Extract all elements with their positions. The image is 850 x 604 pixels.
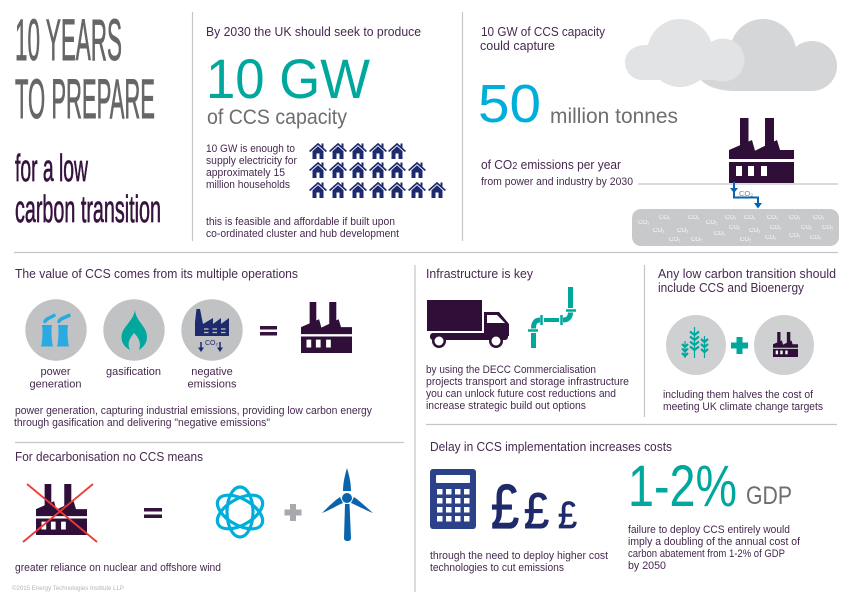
storage reservoir: CO₂ xyxy=(813,215,825,221)
big number 1-2%: 1-2% xyxy=(628,454,737,519)
icon: houses xyxy=(310,144,445,198)
panel: infrastructure xyxy=(426,266,629,412)
feasibility text: this is feasible and affordable if built upon xyxy=(206,216,395,228)
icon: crossed-out factory xyxy=(23,484,97,542)
description: meeting UK climate change targets xyxy=(663,401,823,413)
intro text xyxy=(480,25,606,53)
storage reservoir: CO₂ xyxy=(749,228,761,234)
title: 10 YEARS xyxy=(15,8,122,73)
households text: million households xyxy=(206,179,290,191)
panel: value of CCS xyxy=(14,266,372,429)
description: including them halves the cost of xyxy=(663,389,814,401)
icon: truck xyxy=(427,300,509,348)
heading xyxy=(658,266,836,295)
million tonnes: million tonnes xyxy=(550,105,678,128)
description xyxy=(14,405,372,429)
heading: For decarbonisation no CCS means xyxy=(15,449,203,464)
panel: 50 million tonnes xyxy=(478,19,839,246)
right description xyxy=(628,524,801,572)
heading: Infrastructure is key xyxy=(426,266,533,281)
storage reservoir: CO₂ xyxy=(801,225,813,231)
heading: Any low carbon transition should xyxy=(658,266,836,281)
storage reservoir: CO₂ xyxy=(725,215,737,221)
icon: pound signs: £ xyxy=(491,473,519,542)
households text: approximately 15 xyxy=(206,167,285,179)
intro text: could capture xyxy=(480,39,555,53)
left description: through the need to deploy higher cost xyxy=(430,550,608,562)
icon: atom xyxy=(212,487,268,537)
emissions text: of CO2 emissions per year xyxy=(481,157,622,172)
labels: power xyxy=(41,366,71,378)
heading: include CCS and Bioenergy xyxy=(658,280,804,295)
storage reservoir: CO₂ xyxy=(688,215,700,221)
title xyxy=(15,8,161,231)
storage reservoir: CO₂ xyxy=(653,228,665,234)
ground line xyxy=(638,183,838,185)
storage reservoir: CO₂ xyxy=(740,237,752,243)
left description xyxy=(430,550,608,574)
arrow: CO2 to storage xyxy=(730,182,762,208)
icon: clouds xyxy=(625,19,837,91)
description: increase strategic build out options xyxy=(426,400,586,412)
right description: by 2050 xyxy=(628,560,666,572)
power and industry text: from power and industry by 2030 xyxy=(481,176,633,188)
intro text: By 2030 the UK should seek to produce xyxy=(206,24,421,39)
title: carbon transition xyxy=(15,189,161,231)
icon: power generation xyxy=(25,299,87,361)
icon: factory xyxy=(301,302,352,353)
icon: calculator xyxy=(430,469,476,529)
storage reservoir: CO₂ xyxy=(691,237,703,243)
description xyxy=(426,364,629,412)
storage reservoir xyxy=(632,209,839,246)
panel: CCS and bioenergy xyxy=(658,266,836,413)
plus sign xyxy=(731,337,748,354)
panel: 10 GW xyxy=(206,24,445,240)
labels xyxy=(30,366,237,390)
storage reservoir: CO₂ xyxy=(744,215,756,221)
storage reservoir: CO₂ xyxy=(714,231,726,237)
icon: factory xyxy=(729,118,794,183)
feasibility text xyxy=(206,216,399,240)
description: projects transport and storage infrastructure xyxy=(426,376,629,388)
right description: imply a doubling of the annual cost of xyxy=(628,536,801,548)
households text: 10 GW is enough to xyxy=(206,143,295,155)
storage reservoir: CO₂ xyxy=(677,228,689,234)
description: you can unlock future cost reductions and xyxy=(426,388,616,400)
storage reservoir: CO₂ xyxy=(789,215,801,221)
description: by using the DECC Commercialisation xyxy=(426,364,596,376)
icon: pound signs: £ xyxy=(524,483,549,539)
icon: pound signs: £ xyxy=(558,495,577,537)
storage reservoir: CO₂ xyxy=(638,220,650,226)
storage reservoir: CO₂ xyxy=(659,215,671,221)
description: greater reliance on nuclear and offshore wind xyxy=(15,562,221,574)
equals sign xyxy=(260,326,277,336)
storage reservoir: CO₂ xyxy=(765,235,777,241)
icon: negative emissions xyxy=(181,299,243,361)
labels: emissions xyxy=(188,378,237,390)
icon: pound signs xyxy=(491,473,577,542)
description xyxy=(663,389,823,413)
labels: gasification xyxy=(106,366,161,378)
storage reservoir: CO₂ xyxy=(669,237,681,243)
storage reservoir: CO₂ xyxy=(822,225,834,231)
GDP: GDP xyxy=(746,482,792,510)
storage reservoir: CO₂ xyxy=(767,215,779,221)
storage reservoir: CO₂ xyxy=(789,233,801,239)
labels: generation xyxy=(30,378,82,390)
households text xyxy=(206,143,297,191)
copyright: ©2015 Energy Technologies Institute LLP xyxy=(12,584,124,592)
arrow: CO2 to storage: CO₂ xyxy=(739,189,753,198)
intro text: 10 GW of CCS capacity xyxy=(481,25,606,39)
big number 10 GW: 10 GW xyxy=(206,47,370,110)
right description: failure to deploy CCS entirely would xyxy=(628,524,790,536)
labels: negative xyxy=(191,366,233,378)
icon: pipe xyxy=(528,287,576,348)
icon: wheat xyxy=(666,315,726,375)
of CCS capacity: of CCS capacity xyxy=(207,106,347,129)
big number 50: 50 xyxy=(478,74,541,134)
left description: technologies to cut emissions xyxy=(430,562,564,574)
icon: wind turbine xyxy=(322,468,373,541)
storage reservoir: CO₂ xyxy=(810,235,822,241)
right description: carbon abatement from 1-2% of GDP xyxy=(628,548,785,560)
storage reservoir: CO₂ xyxy=(729,225,741,231)
storage reservoir: CO₂ xyxy=(706,220,718,226)
equals sign xyxy=(144,508,162,518)
text: TO PREPARE xyxy=(15,67,155,130)
heading: The value of CCS comes from its multiple operations xyxy=(15,266,298,281)
panel: no CCS xyxy=(15,449,373,574)
heading: Delay in CCS implementation increases costs xyxy=(430,439,672,454)
description: through gasification and delivering "negative emissions" xyxy=(14,417,270,429)
storage reservoir: CO₂ xyxy=(770,225,782,231)
feasibility text: co-ordinated cluster and hub development xyxy=(206,228,399,240)
icon: gasification xyxy=(103,299,165,361)
description: power generation, capturing industrial emissions, providing low carbon energy xyxy=(15,405,372,417)
icon: negative emissions: CO₂ xyxy=(205,340,218,347)
plus sign xyxy=(284,504,302,521)
households text: supply electricity for xyxy=(206,155,297,167)
title: for a low xyxy=(15,148,88,190)
panel: delay costs xyxy=(430,439,801,574)
icon: small factory xyxy=(754,315,814,375)
